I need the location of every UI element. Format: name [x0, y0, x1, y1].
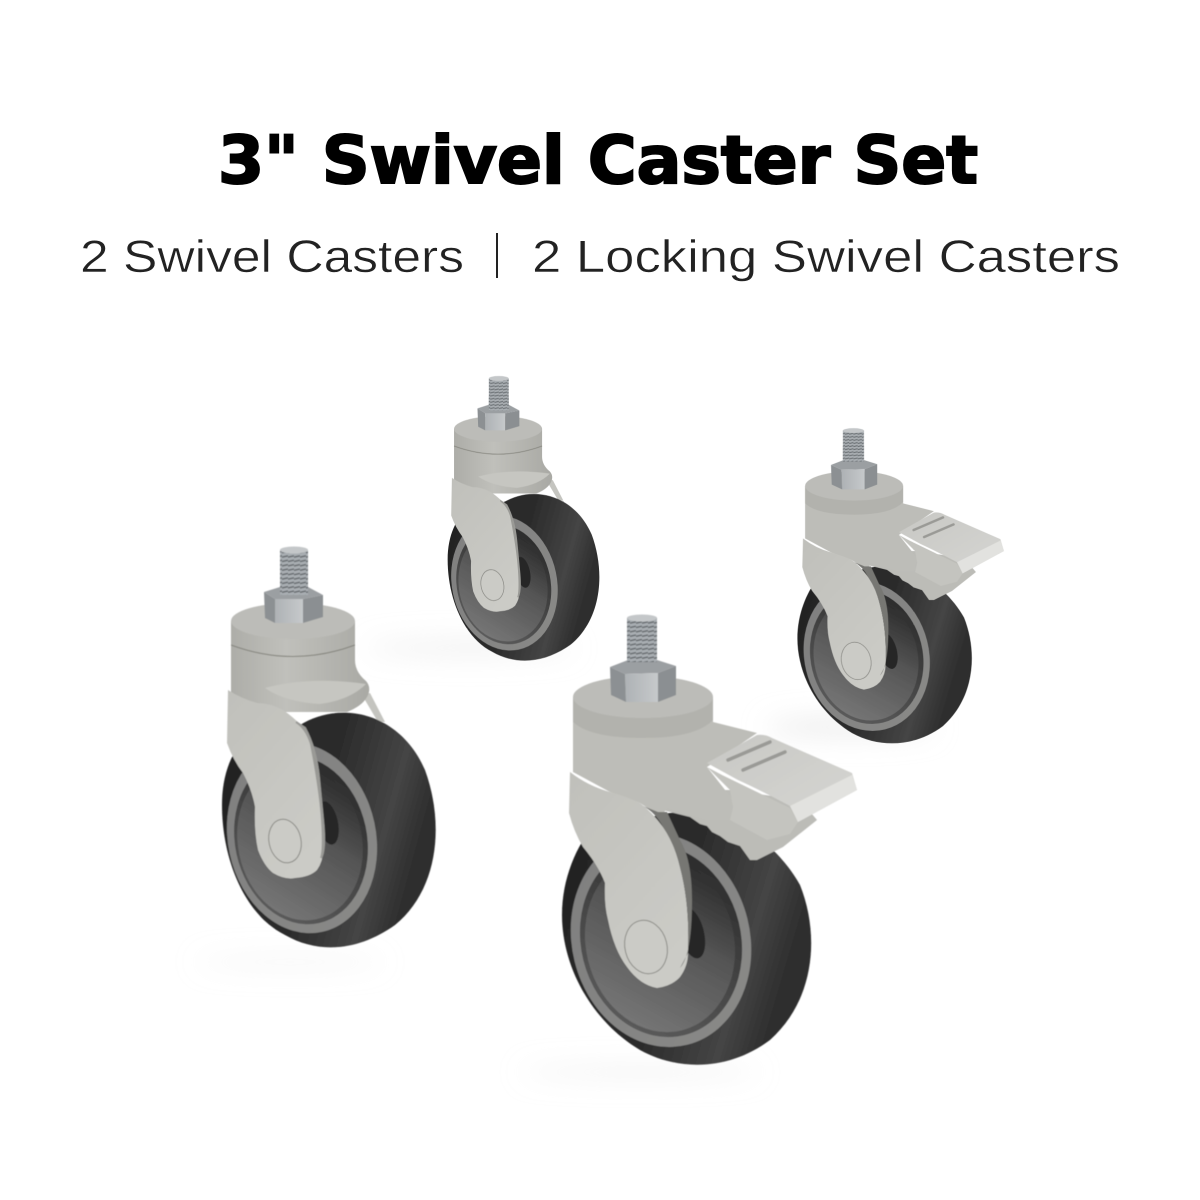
brake bracket [662, 790, 817, 860]
wheel hub [223, 752, 377, 932]
subtitle [80, 231, 1120, 282]
pedal rib [743, 752, 785, 770]
swivel body [231, 621, 369, 712]
subtitle: swivel casters: 2 Swivel Casters [80, 231, 464, 282]
subtitle: separator [496, 233, 498, 278]
subtitle: locking swivel casters: 2 Locking Swivel Casters [532, 231, 1120, 282]
wheel rim [210, 729, 394, 947]
arm inner edge [643, 806, 692, 968]
tire [222, 713, 436, 947]
tire [562, 812, 811, 1065]
threaded stud [280, 546, 308, 596]
axle cap [265, 816, 305, 866]
threaded stud [627, 614, 657, 664]
rear fork [362, 693, 385, 722]
swivel arm [569, 772, 688, 988]
pedal rib [728, 742, 770, 760]
brake pedal [707, 735, 857, 840]
arm inner edge [296, 722, 324, 858]
cylinder top band [573, 697, 713, 738]
wheel hub [566, 838, 754, 1048]
caster: front locking [549, 614, 857, 1066]
wheel rim [549, 814, 773, 1066]
hex nut [264, 575, 323, 623]
hex nut [610, 640, 676, 702]
swivel arm [227, 690, 324, 878]
groove [231, 645, 355, 656]
title: 3" Swivel Caster Set [218, 122, 978, 199]
swivel body [573, 697, 757, 820]
caster: front left swivel [210, 546, 436, 947]
body highlight [265, 681, 366, 704]
cylinder top [231, 603, 355, 639]
axle cap [619, 916, 673, 978]
caster: back locking [788, 428, 1004, 744]
caster: back swivel [439, 376, 599, 661]
floor shadows [195, 639, 935, 1079]
cylinder top [573, 676, 713, 718]
